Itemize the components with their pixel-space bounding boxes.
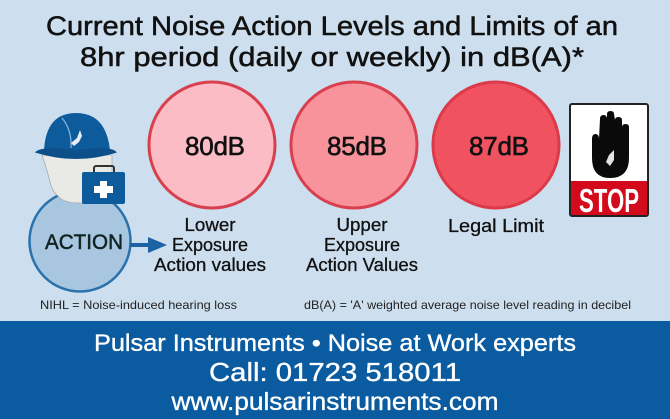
icon: worker head xyxy=(42,155,112,203)
footnote: NIHL: NIHL = Noise-induced hearing loss xyxy=(40,298,237,312)
arrow xyxy=(130,237,167,253)
label: legal limit: Legal Limit xyxy=(448,216,544,236)
label: lower exposure: Lower xyxy=(184,215,236,235)
footnote: dB(A): dB(A) = 'A' weighted average noise level reading in decibel xyxy=(304,298,631,312)
action circle: ACTION xyxy=(45,231,123,254)
footer band: www.pulsarinstruments.com xyxy=(170,388,499,416)
label: lower exposure: Exposure xyxy=(172,235,248,255)
label: lower exposure: Action values xyxy=(154,255,266,275)
circle: 80dB: 80dB xyxy=(185,131,245,161)
icon: hand xyxy=(592,111,629,178)
icon: hard hat xyxy=(37,113,115,158)
title: 8hr period (daily or weekly) in dB(A)* xyxy=(80,42,584,72)
circle: 85dB: 85dB xyxy=(327,131,387,161)
label: upper exposure: Action Values xyxy=(306,255,418,275)
stop sign: STOP xyxy=(579,182,639,219)
footer band xyxy=(0,321,670,419)
title: Current Noise Action Levels and Limits of an xyxy=(46,11,618,41)
icon: hand spark xyxy=(606,150,614,166)
label: upper exposure: Exposure xyxy=(324,235,400,255)
icon: first aid case xyxy=(82,166,125,204)
circle: 80dB xyxy=(149,82,275,208)
footer band: Pulsar Instruments • Noise at Work experts xyxy=(94,330,576,357)
action circle xyxy=(30,190,130,292)
circle: 85dB xyxy=(291,82,417,208)
label: upper exposure: Upper xyxy=(336,215,388,235)
stop sign xyxy=(570,104,648,219)
circle: 87dB: 87dB xyxy=(469,131,529,161)
footer band: Call: 01723 518011 xyxy=(209,357,461,387)
circle: 87dB xyxy=(433,82,559,208)
label: lower exposure xyxy=(154,215,266,275)
title xyxy=(46,11,618,72)
label: upper exposure xyxy=(306,215,418,275)
